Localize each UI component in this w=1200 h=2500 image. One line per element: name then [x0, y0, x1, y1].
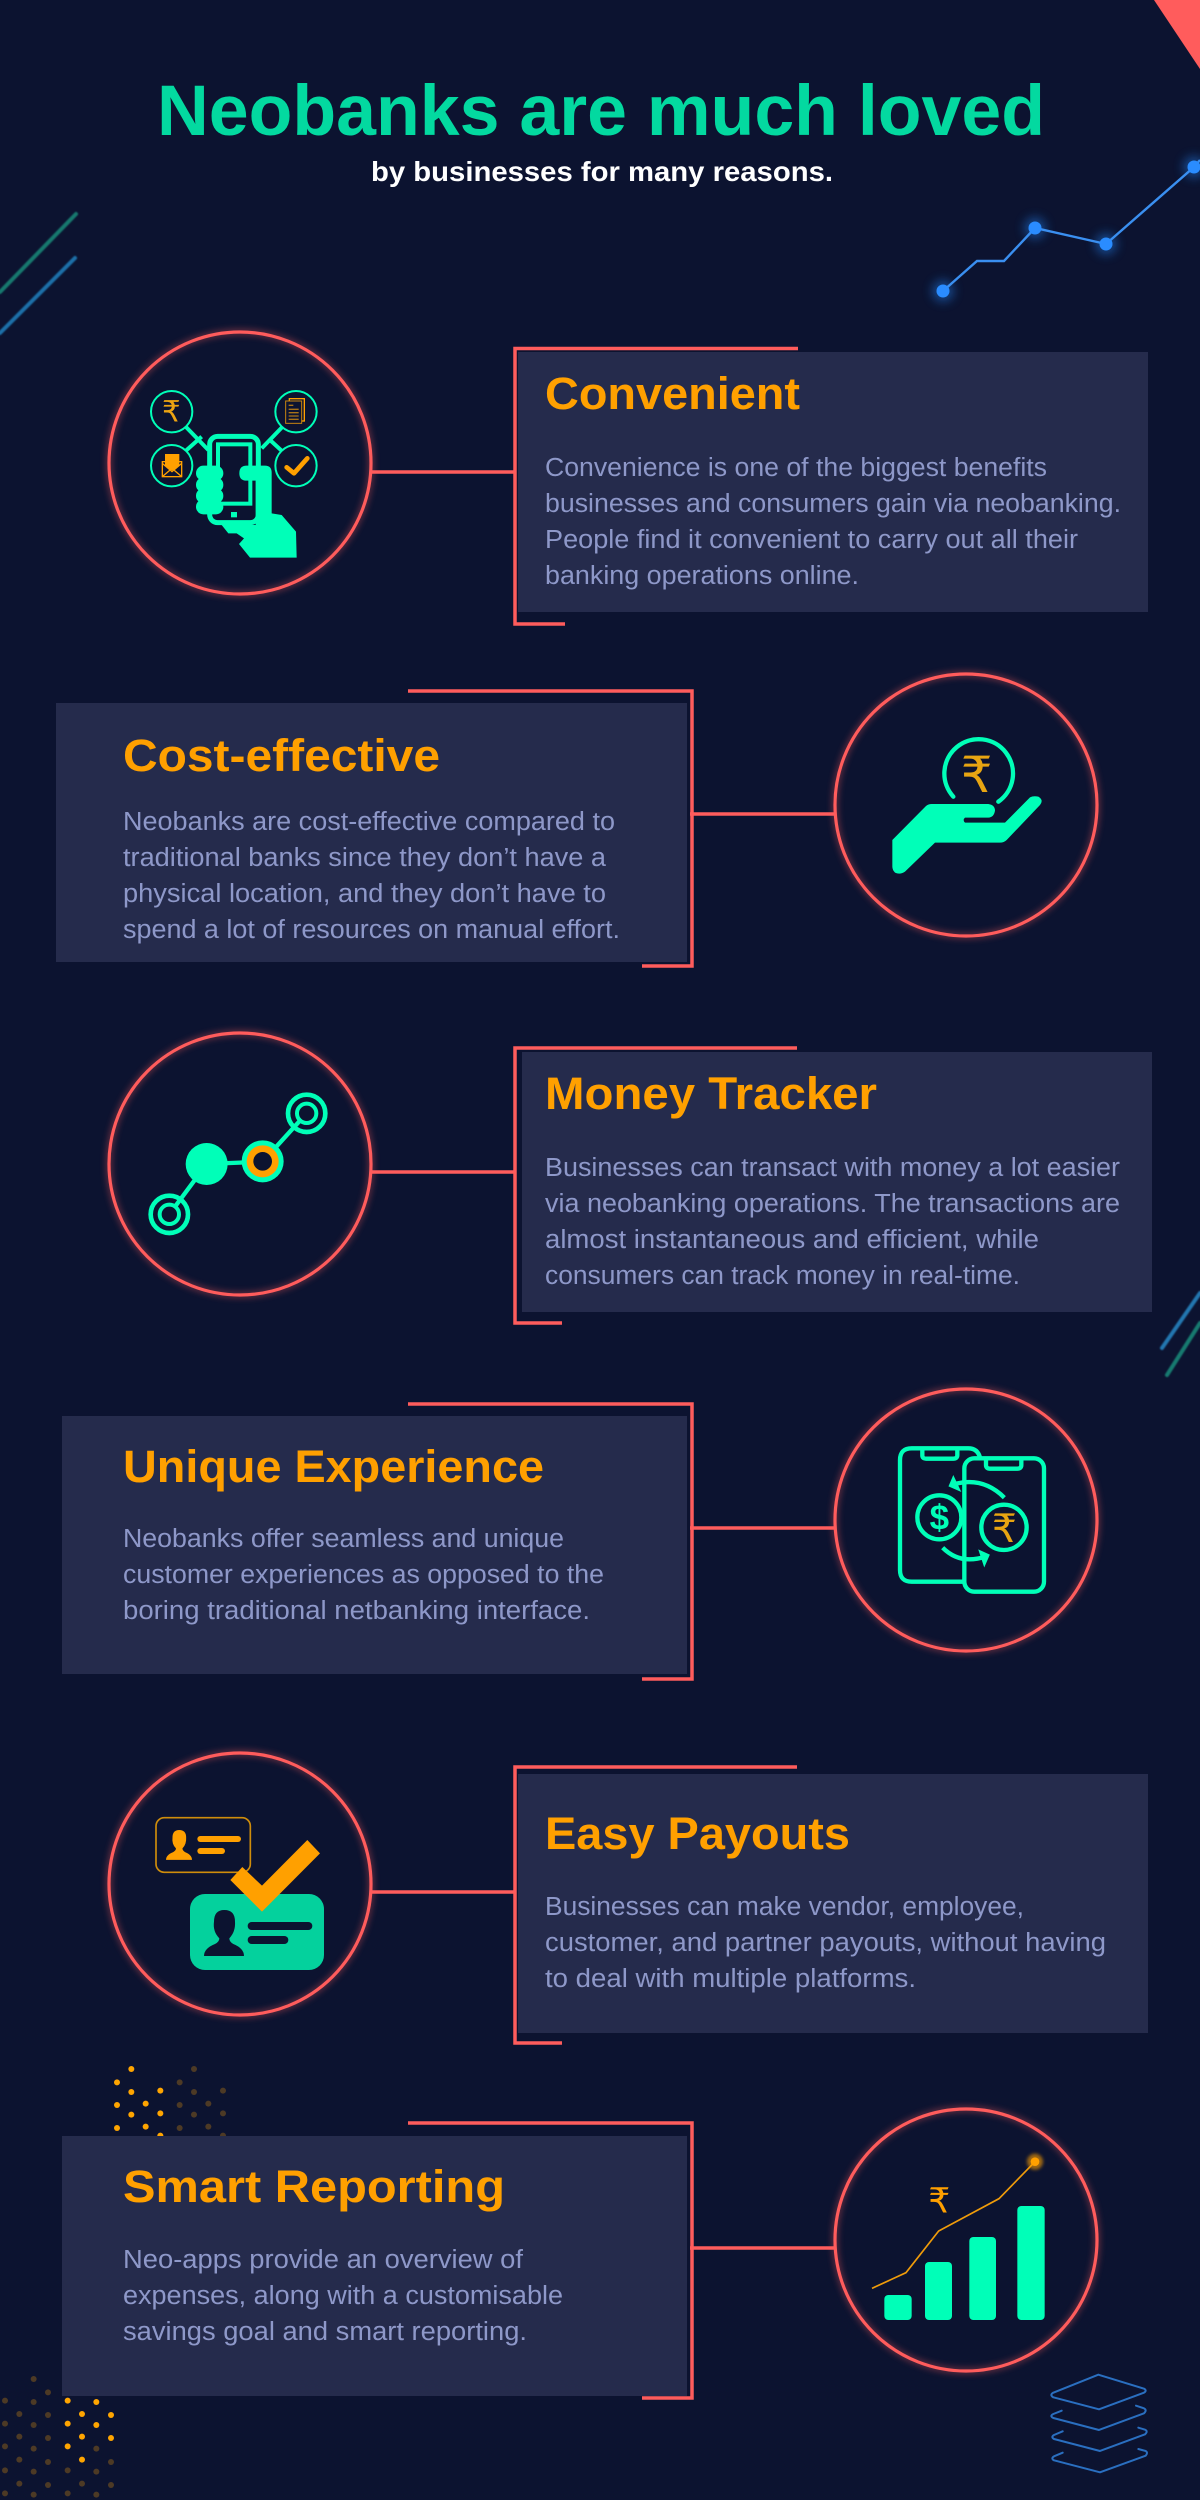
body text: Neobanks are cost-effective compared to	[123, 808, 615, 836]
body text: Convenience is one of the biggest benefits	[545, 454, 1047, 482]
icon: rising bar chart	[872, 2154, 1045, 2320]
body text: boring traditional netbanking interface.	[123, 1597, 590, 1625]
icon circle	[109, 1033, 371, 1295]
connector line	[690, 2246, 835, 2250]
body text: physical location, and they don’t have to	[123, 880, 606, 908]
text panel	[56, 703, 687, 962]
body text: Businesses can make vendor, employee,	[545, 1893, 1024, 1921]
decoration: blue layer stack	[1051, 2375, 1147, 2472]
heading: Money Tracker	[545, 1068, 877, 1119]
item 5: Easy Payouts	[109, 1753, 1148, 2043]
icon: two phones exchanging currency: $	[930, 1498, 949, 1537]
title: Neobanks are much loved	[157, 72, 1045, 151]
subtitle: by businesses for many reasons.	[371, 156, 833, 187]
icon circle	[835, 674, 1097, 936]
icon: hand holding phone	[151, 391, 317, 558]
item 3: Money Tracker	[109, 1033, 1152, 1323]
icon: two phones exchanging currency: ₹	[992, 1507, 1017, 1551]
decoration: corner triangle	[1154, 0, 1200, 69]
text panel	[62, 2136, 687, 2396]
bracket	[515, 1767, 797, 2043]
bracket	[515, 1048, 797, 1323]
text panel	[518, 352, 1148, 612]
body text: consumers can track money in real-time.	[545, 1262, 1020, 1290]
item 6: Smart Reporting	[62, 2109, 1097, 2398]
item 2: Cost-effective	[56, 674, 1097, 966]
decoration: right streaks	[1162, 1293, 1200, 1375]
heading: Unique Experience	[123, 1441, 544, 1492]
text panel	[522, 1052, 1152, 1312]
body text	[545, 454, 1121, 590]
icon: two phones exchanging currency	[900, 1448, 1044, 1592]
body text: Neo-apps provide an overview of	[123, 2246, 524, 2274]
icon circle	[835, 1389, 1097, 1651]
heading: Convenient	[545, 368, 800, 419]
icon: connected nodes	[151, 1095, 325, 1233]
icon: rising bar chart: ₹	[928, 2183, 950, 2221]
connector line	[690, 1526, 835, 1530]
bracket	[408, 1404, 692, 1679]
body text: Businesses can transact with money a lot easier	[545, 1154, 1121, 1182]
body text: customer experiences as opposed to the	[123, 1561, 604, 1589]
body text: customer, and partner payouts, without having	[545, 1929, 1106, 1957]
body text: banking operations online.	[545, 562, 859, 590]
body text: expenses, along with a customisable	[123, 2282, 563, 2310]
body text	[123, 2246, 563, 2346]
body text	[545, 1154, 1121, 1290]
icon circle	[109, 1753, 371, 2015]
decoration: left streaks	[0, 214, 76, 333]
decoration: blue line chart	[932, 156, 1200, 302]
body text: People find it convenient to carry out all their	[545, 526, 1079, 554]
text panel	[62, 1416, 687, 1674]
body text: via neobanking operations. The transactions are	[545, 1190, 1120, 1218]
heading: Easy Payouts	[545, 1808, 850, 1859]
body text: Neobanks offer seamless and unique	[123, 1525, 564, 1553]
body text	[545, 1893, 1106, 1993]
icon: hand with rupee coin	[892, 739, 1042, 874]
body text: almost instantaneous and efficient, while	[545, 1226, 1039, 1254]
body text: savings goal and smart reporting.	[123, 2318, 527, 2346]
item 4: Unique Experience	[62, 1389, 1097, 1679]
body text	[123, 1525, 604, 1625]
heading: Cost-effective	[123, 730, 440, 781]
icon: hand with rupee coin: ₹	[961, 747, 993, 803]
decoration: lower dot cluster	[2, 2376, 114, 2498]
decoration: upper dot cluster	[114, 2066, 226, 2139]
icon: ID cards with check	[156, 1818, 324, 1970]
item 1: Convenient	[109, 332, 1148, 624]
heading: Smart Reporting	[123, 2161, 505, 2212]
bracket	[515, 348, 798, 624]
body text: traditional banks since they don’t have a	[123, 844, 607, 872]
body text: businesses and consumers gain via neobanking.	[545, 490, 1121, 518]
connector line	[371, 470, 515, 474]
icon circle	[109, 332, 371, 594]
connector line	[371, 1170, 515, 1174]
body text: spend a lot of resources on manual effort.	[123, 916, 620, 944]
bracket	[408, 2123, 692, 2398]
body text: to deal with multiple platforms.	[545, 1965, 916, 1993]
body text	[123, 808, 620, 944]
icon circle	[835, 2109, 1097, 2371]
connector line	[371, 1890, 515, 1894]
icon: hand holding phone: ₹	[162, 396, 181, 429]
bracket	[408, 691, 692, 966]
connector line	[690, 812, 835, 816]
text panel	[518, 1774, 1148, 2033]
